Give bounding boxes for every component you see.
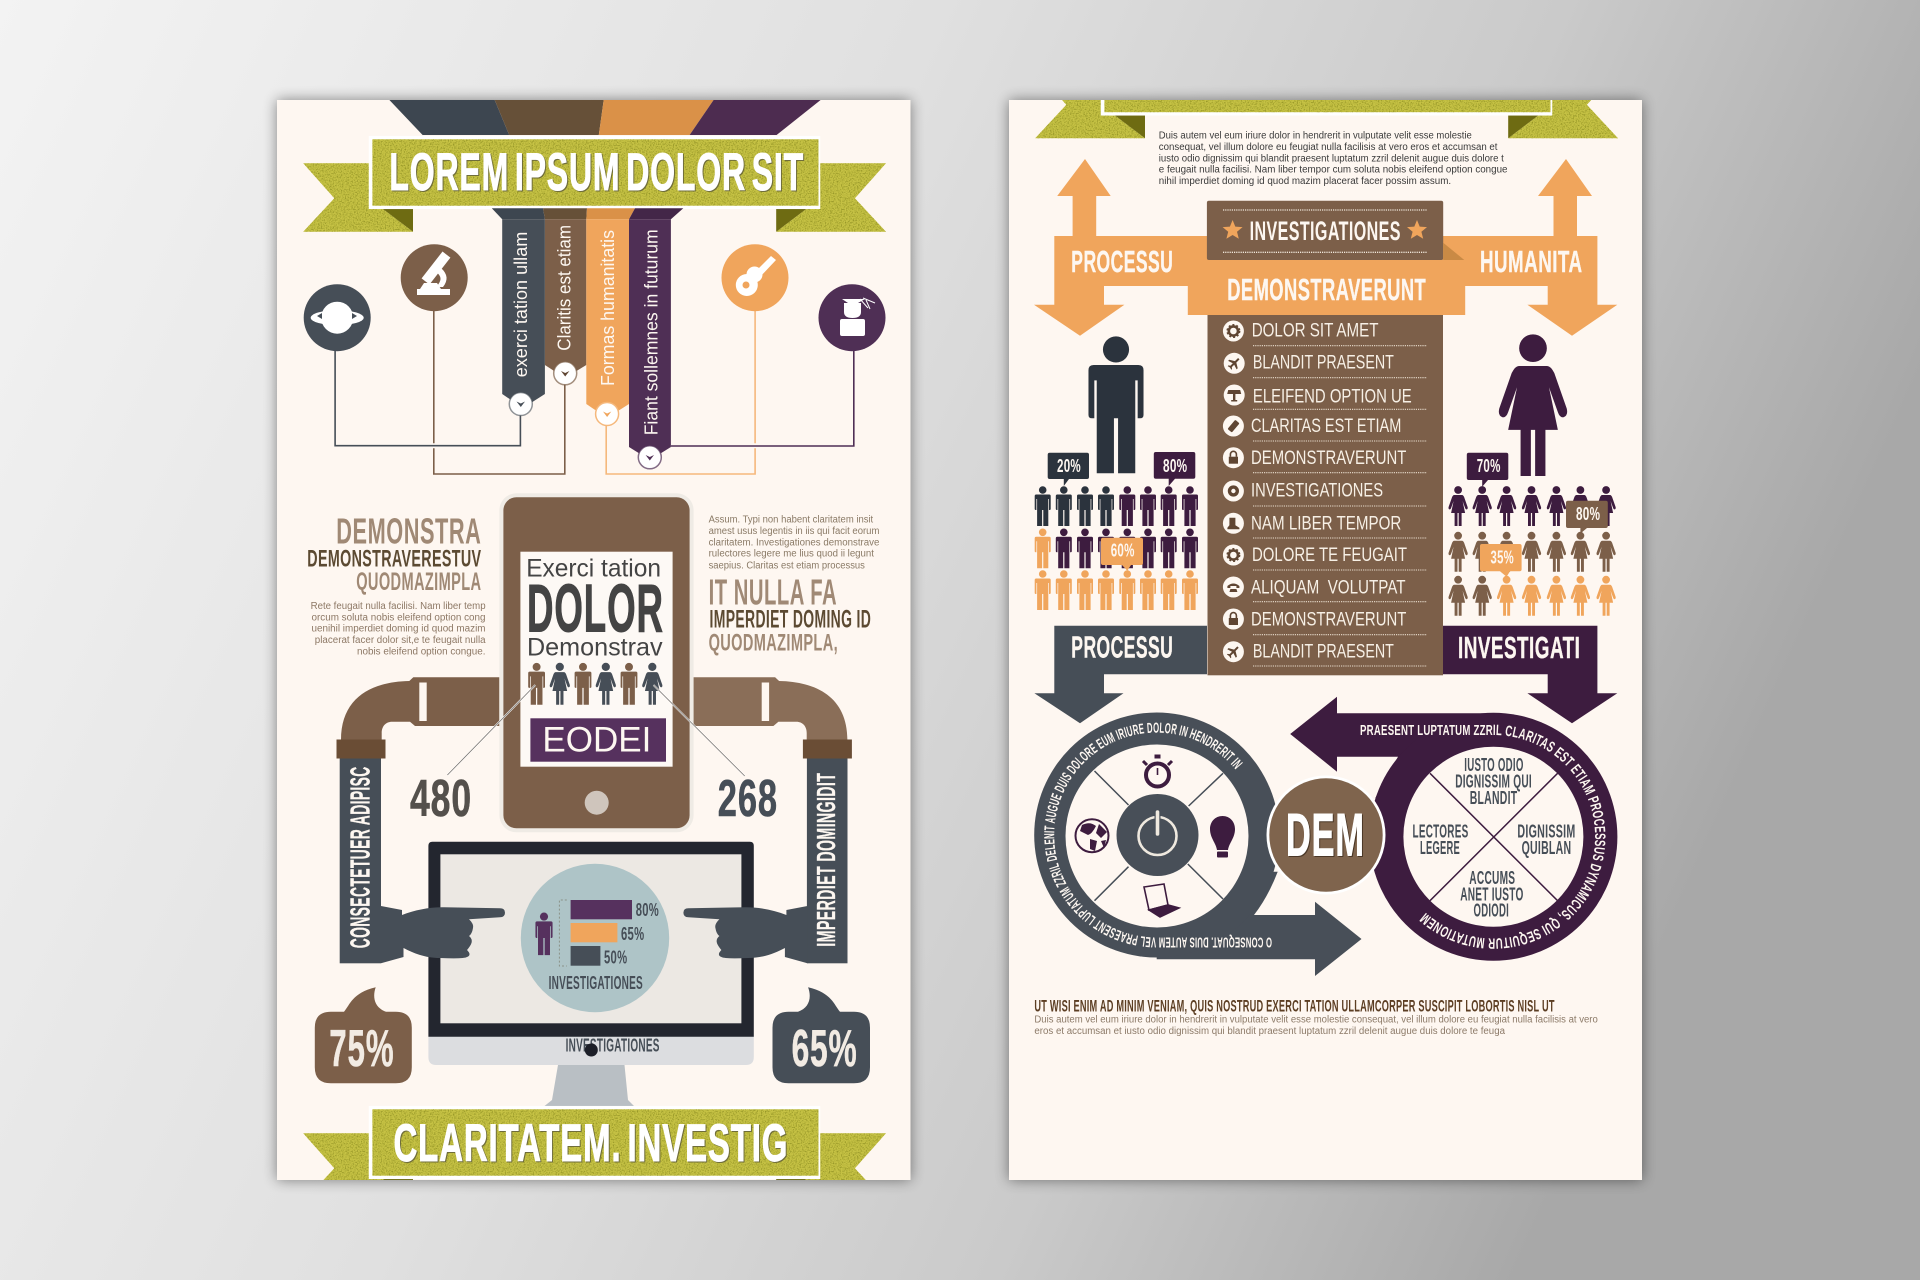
chart: right ring with arrow	[1290, 696, 1618, 961]
quadrant labels: ACCUMS	[1469, 867, 1515, 888]
phone screen: Demonstrav	[527, 634, 663, 662]
callout: 70%: 70%	[1477, 456, 1501, 476]
quadrant labels: QUIBLAN	[1522, 837, 1571, 858]
callout: 75%	[315, 987, 412, 1083]
phone screen: Exerci tation	[526, 555, 661, 583]
icon: large woman	[1499, 334, 1567, 476]
text block: right paragraph: amest usus legentis in iis qui facit eorum	[709, 526, 879, 537]
icon: left pointing hand	[381, 906, 505, 963]
text block: right paragraph: Assum. Typi non habent claritatem insit	[709, 515, 873, 526]
panel: brown list	[1071, 201, 1582, 675]
monitor chin label: INVESTIGATIONES	[566, 1036, 660, 1056]
icon: right pointing hand	[683, 906, 807, 963]
text block: right heading: QUODMAZIMPLA,	[709, 630, 838, 657]
panel: right page	[1009, 100, 1642, 1180]
text block: right paragraph: saepius. Claritas est etiam processus	[709, 560, 865, 571]
list item: demonstraverunt 2: DEMONSTRAVERUNT	[1251, 609, 1406, 631]
callout: 80% men: 80%	[1163, 456, 1187, 476]
list item: nam liber tempor	[1223, 512, 1401, 534]
callout: 60%: 60%	[1111, 541, 1135, 561]
top ribbon cut off	[1035, 100, 1618, 138]
text block: intro paragraph: consequat, vel illum dolore eu feugiat nulla facilisis at vero eros et accumsan et	[1159, 142, 1498, 153]
quadrant labels	[1412, 754, 1576, 921]
text block: left paragraph: nobis eleifend option congue.	[357, 646, 486, 657]
quadrant labels: ANET IUSTO	[1460, 884, 1524, 905]
text block: right heading: IT NULLA FA	[709, 571, 837, 612]
EODEI label: EODEI	[542, 720, 651, 760]
quadrant labels: BLANDIT	[1470, 787, 1518, 808]
bar chart circle: 50%	[604, 947, 627, 967]
top fan of coloured bands	[389, 100, 821, 135]
list item: blandit praesent	[1224, 352, 1394, 374]
heading: investigationes: INVESTIGATIONES	[1250, 216, 1401, 246]
callout: 70%	[1467, 453, 1508, 487]
text block: intro paragraph: nihil imperdiet doming id quod mazim placerat facer possim assum.	[1159, 176, 1451, 187]
phone	[499, 493, 694, 832]
ribbon: exerci tation ullam	[502, 219, 545, 416]
monitor chin label	[566, 1038, 659, 1056]
arrow: navy down	[1034, 626, 1207, 723]
list item: demonstraverunt 2	[1223, 608, 1406, 631]
pointer lines and numbers: 268	[718, 770, 778, 828]
right pipe: IMPERDIET DOMINGIDIT	[811, 773, 841, 947]
pointer lines and numbers: 480	[410, 770, 472, 828]
band labels: DEMONSTRAVERUNT	[1227, 273, 1426, 307]
icon: power	[1138, 812, 1176, 855]
icon: globe	[1076, 819, 1108, 852]
pointer lines and numbers	[410, 685, 778, 828]
arrow: purple down	[1443, 626, 1617, 723]
list item: eleifend option ue	[1224, 384, 1412, 408]
list item: aliquam volutpat	[1223, 576, 1406, 598]
quadrant labels: DIGNISSIM	[1517, 821, 1576, 842]
icon: microscope	[401, 244, 468, 311]
pictogram: women grid	[1448, 486, 1616, 616]
icon: planet	[304, 284, 371, 351]
left pipe: CONSECTETUER ADIPISC	[344, 766, 376, 948]
center badge: DEM	[1266, 776, 1386, 894]
callout: 75%: 75%	[329, 1020, 394, 1078]
phone screen	[520, 552, 673, 767]
title ribbon	[303, 137, 886, 232]
text block: left paragraph: Rete feugait nulla facilisi. Nam liber temp	[311, 601, 486, 612]
list item: investigationes	[1223, 480, 1383, 502]
icon: guitar	[722, 244, 788, 311]
band labels: HUMANITA	[1480, 245, 1582, 279]
list item: blandit praesent: BLANDIT PRAESENT	[1253, 352, 1394, 374]
bar chart circle: 80%	[636, 900, 659, 920]
icon: graduate	[818, 284, 886, 351]
callout: 80% women	[1566, 501, 1608, 534]
vertical ribbons	[492, 208, 683, 469]
icon: large man	[1088, 336, 1144, 473]
text block: footer: Duis autem vel eum iriure dolor in hendrerit in vulputate velit esse molestie consequat, vel illum dolore eu feugiat nulla facilisis at vero	[1034, 1015, 1598, 1026]
list item: investigationes: INVESTIGATIONES	[1251, 480, 1383, 502]
band labels: PROCESSU	[1071, 630, 1173, 664]
quadrant labels: DIGNISSIM QUI	[1455, 770, 1532, 791]
quadrant labels: LECTORES	[1412, 821, 1468, 842]
ribbon: formas humanitatis	[586, 219, 629, 426]
icon: bulb	[1210, 816, 1235, 858]
icon: laptop	[1144, 884, 1179, 917]
chart: left ring with arrow	[1034, 712, 1362, 976]
text block: footer: eros et accumsan et iusto odio dignissim qui blandit praesent luptatum zzril delenit augue duis dolore te feuga	[1034, 1026, 1505, 1037]
band labels	[1071, 245, 1582, 665]
callout: 80% men	[1154, 452, 1195, 486]
list item: demonstraverunt	[1223, 447, 1406, 469]
text block: footer	[1034, 997, 1598, 1037]
text block: right paragraph	[709, 515, 880, 571]
panel: left page	[277, 100, 910, 1202]
center badge: DEM: DEM	[1286, 801, 1365, 869]
ring text: left: O CONSEQUAT. DUIS AUTEM VEL PRAESENT LUPTATUM ZZRIL DELENIT AUGUE DUIS DOLORE EUM IRIURE DOLOR IN HENDRERIT IN	[1044, 722, 1272, 948]
text block: left heading	[308, 518, 481, 595]
text block: right paragraph: claritatem. Investigationes demonstrave	[709, 538, 880, 549]
band labels: PROCESSU	[1071, 245, 1173, 279]
quadrant labels: LEGERE	[1420, 837, 1460, 858]
list item: demonstraverunt: DEMONSTRAVERUNT	[1251, 447, 1406, 469]
text block: intro paragraph	[1159, 131, 1508, 187]
callout: 65%: 65%	[792, 1020, 858, 1078]
callout: 35%	[1480, 544, 1522, 577]
text block: intro paragraph: iusto odio dignissim qui blandit praesent luptatum zzril delenit augue duis dolore t	[1159, 153, 1504, 164]
list item: dolor sit amet: DOLOR SIT AMET	[1252, 320, 1379, 342]
text block: intro paragraph: e feugait nulla facilisi. Nam liber tempor cum soluta nobis eleifend option congue	[1159, 165, 1508, 176]
list item: blandit praesent 2: BLANDIT PRAESENT	[1253, 640, 1394, 662]
list item: aliquam volutpat: ALIQUAM VOLUTPAT	[1251, 576, 1406, 598]
list item: nam liber tempor: NAM LIBER TEMPOR	[1251, 512, 1401, 534]
text block: left paragraph: uenihil imperdiet doming id quod mazim	[312, 624, 486, 635]
text block: left paragraph	[311, 601, 486, 657]
callout: 80% women: 80%	[1576, 504, 1600, 524]
text block: left heading: QUODMAZIMPLA	[356, 568, 481, 596]
right pipe	[689, 677, 852, 963]
list item: blandit praesent 2	[1223, 640, 1394, 662]
text block: right heading: IMPERDIET DOMING ID	[710, 605, 871, 633]
ribbon: claritis est etiam	[545, 219, 586, 385]
left pipe	[336, 677, 499, 963]
list item: dolore te feugait: DOLORE TE FEUGAIT	[1252, 544, 1407, 566]
ribbon: claritis est etiam: Claritis est etiam	[555, 225, 575, 351]
ring text: right: PRAESENT LUPTATUM ZZRIL CLARITAS EST ETIAM PROCESSUS DYNAMICUS, QUI SEQUITUR MUTATIONEM	[1360, 724, 1606, 949]
callout: 20%: 20%	[1057, 456, 1081, 476]
ribbon: formas humanitatis: Formas humanitatis	[598, 230, 618, 386]
quadrant labels: IUSTO ODIO	[1464, 754, 1524, 775]
bottom ribbon: CLARITATEM. INVESTIG	[394, 1114, 788, 1173]
icon: stopwatch	[1143, 754, 1172, 786]
text block: left heading: DEMONSTRA	[336, 510, 481, 551]
text block: left heading: DEMONSTRAVERESTUV	[307, 546, 481, 573]
text block: right heading	[709, 580, 870, 656]
list item: dolore te feugait	[1223, 544, 1407, 566]
text block: intro paragraph: Duis autem vel eum iriure dolor in hendrerit in vulputate velit esse molestie	[1159, 131, 1472, 142]
list item: claritas est etiam	[1223, 415, 1401, 437]
text block: left paragraph: orcum soluta nobis eleifend option cong	[312, 612, 486, 623]
callout: 35%: 35%	[1490, 547, 1514, 567]
callout: 65%	[772, 987, 870, 1083]
text block: right paragraph: rulectores legere me lius quod ii legunt	[709, 549, 874, 560]
ribbon: fiant sollemnes in futurum: Fiant sollemnes in futurum	[642, 229, 662, 435]
phone people row	[528, 663, 662, 705]
monitor	[428, 842, 754, 1110]
list item: dolor sit amet	[1223, 320, 1379, 342]
pictogram: men grid	[1035, 486, 1198, 610]
phone screen: DOLOR	[527, 571, 664, 647]
bottom ribbon	[303, 1106, 886, 1180]
list item: eleifend option ue: ELEIFEND OPTION UE	[1253, 386, 1412, 408]
connector lines	[335, 311, 854, 474]
bar chart circle	[521, 864, 669, 1012]
heading: investigationes	[1223, 216, 1427, 246]
ribbon: fiant sollemnes in futurum	[629, 219, 671, 469]
ribbon: exerci tation ullam: exerci tation ullam	[511, 232, 531, 377]
arrows: orange cross band	[1034, 159, 1617, 336]
text block: left paragraph: placerat facer dolor sit,e te feugait nulla	[315, 635, 486, 646]
quadrant labels: ODIODI	[1474, 900, 1509, 921]
band labels: INVESTIGATI	[1458, 631, 1580, 665]
list item: claritas est etiam: CLARITAS EST ETIAM	[1251, 415, 1401, 437]
callout: 20%	[1048, 453, 1089, 486]
title: LOREM IPSUM DOLOR SIT	[389, 143, 804, 202]
bar chart circle: 65%	[621, 924, 644, 944]
bar chart circle: INVESTIGATIONES	[549, 973, 643, 993]
callout: 60%	[1101, 538, 1143, 571]
